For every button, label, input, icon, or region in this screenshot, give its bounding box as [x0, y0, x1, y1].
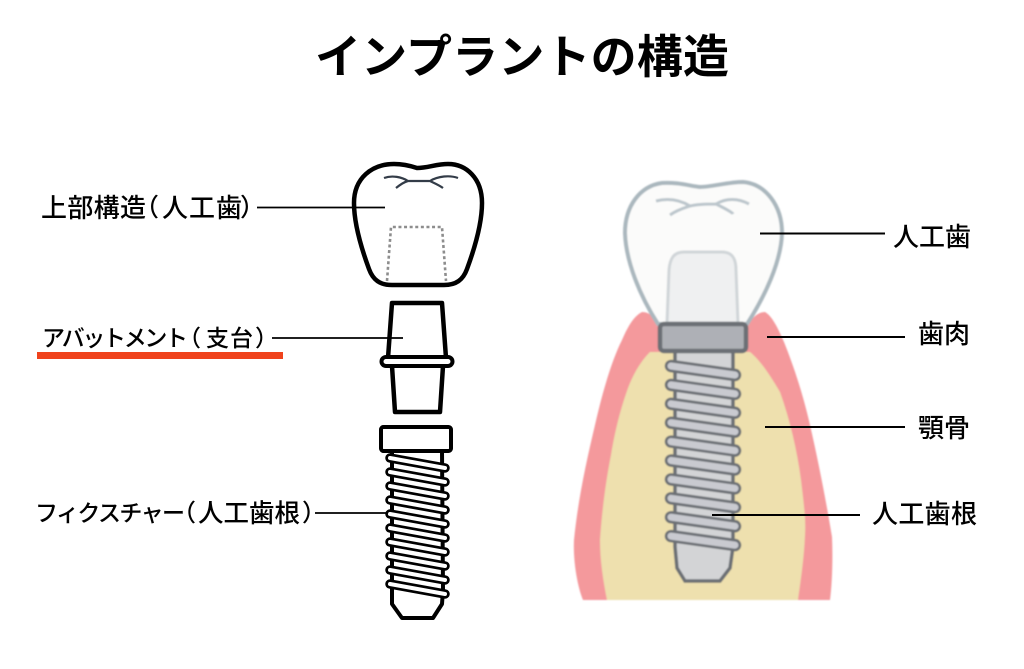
crown occlusal groove: [656, 200, 749, 215]
left diagram: exploded implant parts: [354, 164, 482, 618]
label: artificial tooth root: 人工歯根: [872, 499, 977, 529]
label: gum: 歯肉: [918, 319, 970, 349]
label: abutment with red underline: [37, 325, 403, 359]
fixture body and threads: [671, 350, 735, 581]
label: crown (upper structure): ）: [240, 194, 265, 222]
right diagram: implant placed in jaw: [574, 182, 832, 600]
label: abutment with red underline: （: [178, 325, 201, 351]
label: crown (upper structure): 上部構造: [41, 193, 146, 223]
label: abutment with red underline: アバットメント: [42, 325, 188, 351]
label: crown (upper structure): 人工歯: [162, 193, 242, 223]
bone: [600, 352, 805, 600]
label: crown (upper structure): （: [134, 194, 159, 222]
label: abutment with red underline: 支台: [206, 325, 253, 351]
label: crown (upper structure): [41, 193, 385, 223]
label: fixture: （: [172, 500, 196, 527]
label: fixture: [35, 500, 386, 528]
label: abutment with red underline: ）: [255, 325, 278, 351]
crown: [625, 182, 782, 324]
icon: abutment: [382, 303, 452, 412]
abutment collar: [660, 324, 746, 351]
abutment inside crown: [667, 252, 738, 323]
label: fixture: フィクスチャー: [35, 500, 185, 526]
label: jawbone: 顎骨: [918, 413, 970, 443]
title: インプラントの構造: [315, 31, 729, 83]
label: fixture: 人工歯根: [198, 500, 300, 528]
icon: fixture: [381, 427, 451, 618]
gum: [574, 312, 832, 600]
label: artificial tooth: 人工歯: [893, 222, 971, 252]
icon: crown outline: [354, 164, 482, 285]
label: fixture: ）: [302, 500, 326, 527]
